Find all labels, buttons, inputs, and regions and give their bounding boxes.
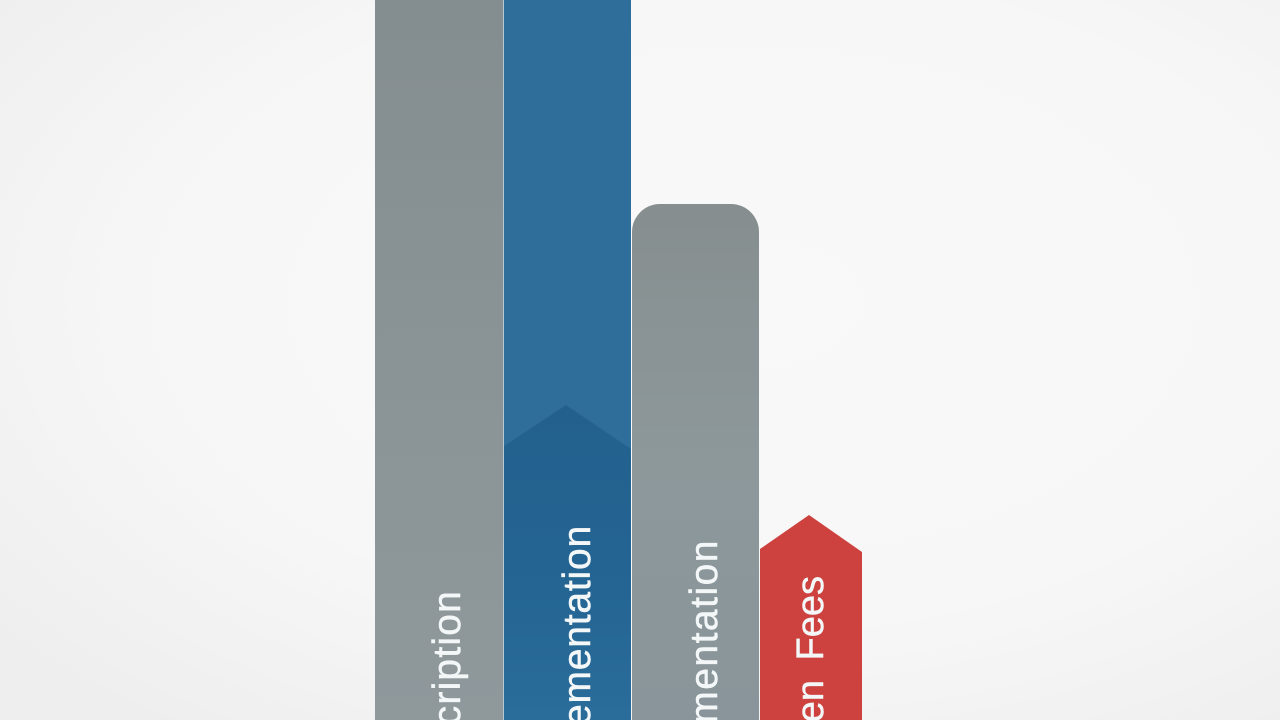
- bar: implementation: [504, 0, 631, 720]
- bar: hidden fees: [760, 515, 862, 720]
- darker arrow section: [504, 405, 631, 656]
- bar chart: [0, 0, 862, 720]
- divider edge: left of blue bar: [503, 0, 504, 720]
- bar: documentation: [632, 204, 759, 720]
- bar: subscription: [375, 0, 503, 720]
